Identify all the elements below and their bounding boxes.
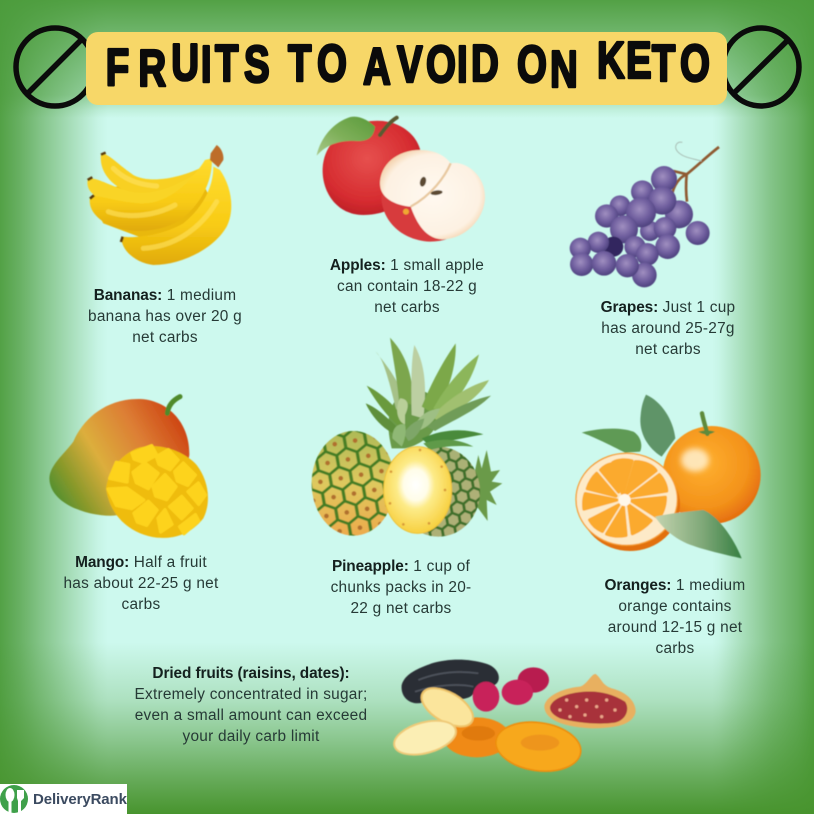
- caption: oranges: around 12-15 g net: [608, 619, 742, 636]
- caption: bananas: [88, 287, 242, 346]
- caption: mango: [63, 554, 219, 613]
- caption: pineapple: [331, 558, 471, 617]
- title banner: FRUITS TO AVOID ON KETO: [106, 31, 710, 98]
- caption: oranges: carbs: [656, 640, 694, 657]
- caption: oranges: orange contains: [618, 598, 732, 615]
- caption: apples: can contain 18-22 g: [337, 278, 477, 295]
- caption: dried fruits: [135, 665, 367, 745]
- caption: dried fruits: even a small amount can exceed: [135, 707, 367, 724]
- caption: pineapple: 22 g net carbs: [350, 600, 452, 617]
- caption: dried fruits: Dried fruits (raisins, dates):: [152, 665, 350, 682]
- caption: grapes: [601, 299, 735, 358]
- oranges: [576, 395, 761, 558]
- caption: oranges: Oranges: 1 medium: [605, 577, 745, 594]
- icon: spoon and fork: [0, 785, 28, 813]
- caption: apples: net carbs: [374, 299, 440, 316]
- prohibition icon left: [16, 28, 94, 106]
- caption: pineapple: chunks packs in 20-: [331, 579, 471, 596]
- caption: mango: has about 22-25 g net: [63, 575, 219, 592]
- caption: bananas: Bananas: 1 medium: [94, 287, 236, 304]
- caption: bananas: net carbs: [132, 329, 198, 346]
- caption: pineapple: Pineapple: 1 cup of: [332, 558, 470, 575]
- bananas: [87, 145, 231, 265]
- apples: [317, 117, 485, 242]
- prohibition icon right: [723, 28, 799, 106]
- caption: bananas: banana has over 20 g: [88, 308, 242, 325]
- dried fruits: [390, 660, 636, 776]
- mango: [49, 397, 208, 538]
- grapes: [570, 142, 719, 287]
- caption: mango: carbs: [122, 596, 160, 613]
- caption: apples: [330, 257, 484, 316]
- caption: grapes: net carbs: [635, 341, 701, 358]
- caption: grapes: Grapes: Just 1 cup: [601, 299, 735, 316]
- caption: dried fruits: Extremely concentrated in sugar;: [135, 686, 367, 703]
- pineapple: [312, 338, 502, 537]
- caption: mango: Mango: Half a fruit: [75, 554, 207, 571]
- logo wordmark: DeliveryRank: [33, 791, 127, 808]
- caption: grapes: has around 25-27g: [601, 320, 735, 337]
- caption: oranges: [605, 577, 745, 657]
- caption: apples: Apples: 1 small apple: [330, 257, 484, 274]
- DeliveryRank logo: [0, 784, 127, 814]
- caption: dried fruits: your daily carb limit: [183, 728, 319, 745]
